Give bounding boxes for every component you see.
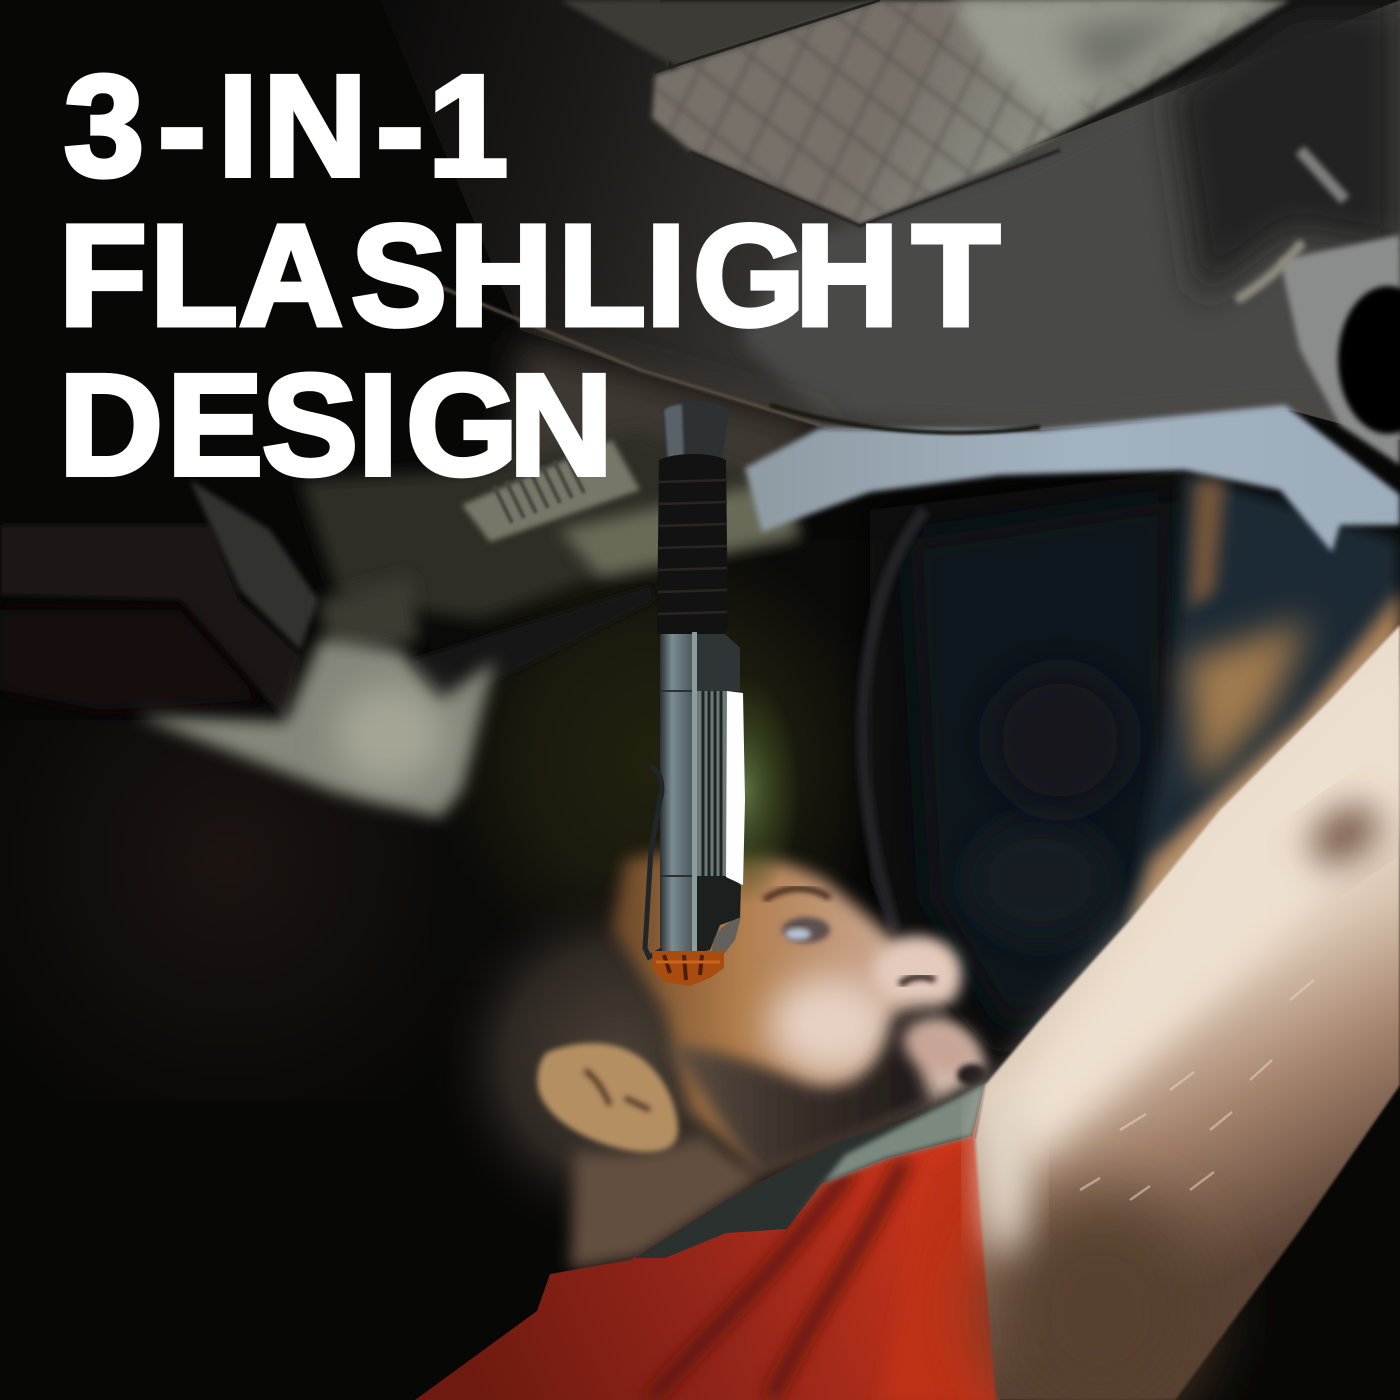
beard: [668, 1008, 950, 1178]
side light glow: [690, 675, 800, 905]
icon: ear: [537, 1043, 678, 1152]
mouth: [896, 1012, 984, 1084]
eyebrow: [764, 888, 830, 900]
panel: blurred right background: [1130, 470, 1400, 930]
panel: red shirt: [415, 1083, 1000, 1400]
panel: raised arm: [975, 625, 1400, 1400]
lower dark block: [697, 876, 741, 953]
panel: mechanic head: [430, 850, 987, 1270]
panel: foil heat shield: [560, 0, 1290, 226]
nose: [873, 940, 957, 1004]
arm hair highlights: [1080, 980, 1314, 1200]
face: [612, 850, 985, 1170]
panel: lit white underbody patch: [135, 640, 495, 818]
title line 3: DESIGN: [59, 344, 613, 506]
hair: [430, 870, 810, 1250]
soul patch: [957, 1064, 987, 1086]
ribbed body section: [697, 691, 727, 876]
eye: [782, 917, 830, 943]
COB side light: [726, 691, 745, 885]
knurled grip: [657, 454, 728, 636]
shirt collar band: [634, 1083, 986, 1258]
bright body stripe: [692, 632, 697, 952]
metal tail tab: [712, 917, 741, 954]
panel: car underbody: [300, 0, 1400, 620]
panel: tire and dark wheel well: [863, 470, 1190, 1060]
panel: exhaust pipe: [1240, 150, 1400, 465]
icon: flashlight: [645, 401, 800, 986]
title line 2: FLASHLIGHT: [59, 195, 1000, 356]
pocket clip: [645, 767, 662, 957]
neck: [570, 1135, 765, 1270]
flashlight head: [662, 401, 729, 462]
title: [59, 46, 1000, 506]
panel: left frame beams: [0, 480, 655, 720]
upper body block: [697, 634, 740, 691]
barcode label: [462, 440, 640, 542]
title line 1: 3-IN-1: [64, 46, 508, 206]
cheek highlight: [769, 977, 889, 1073]
panel: underbody lit rim: [745, 405, 1400, 552]
orange end cap: [652, 951, 724, 986]
metal body: [660, 634, 698, 954]
